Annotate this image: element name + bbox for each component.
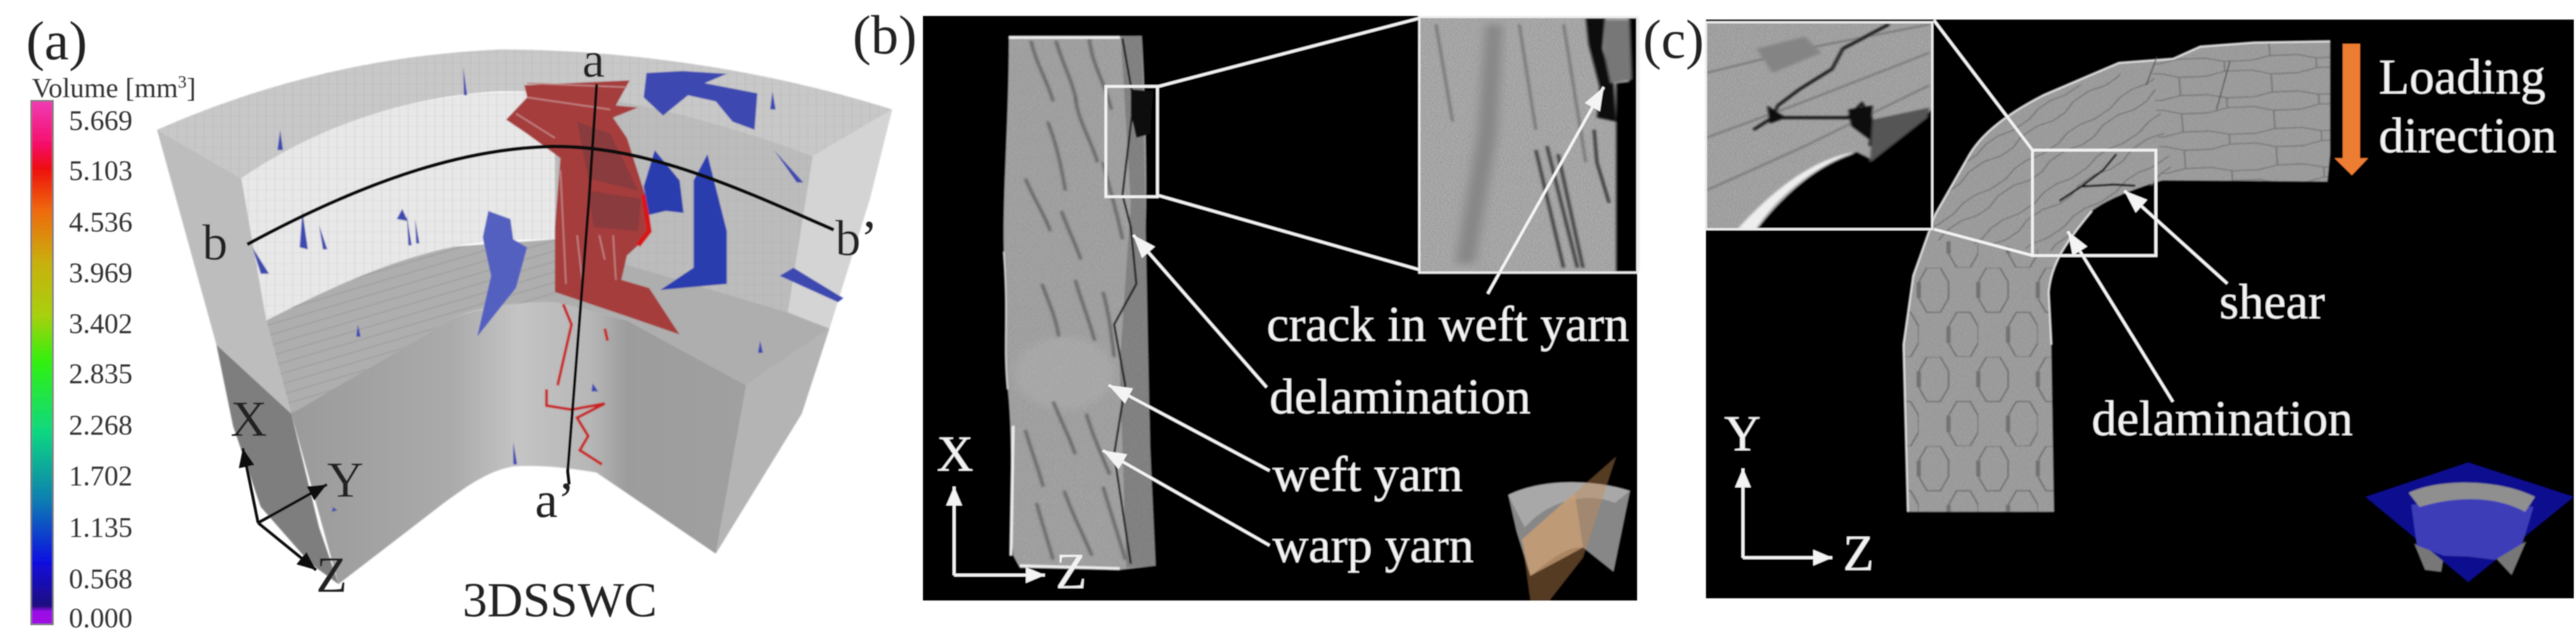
legend title: Volume [mm [32,73,178,104]
callout: delamination: delamination [2092,391,2353,446]
axis labels: Y [327,453,364,508]
callout: delamination: delamination [1270,369,1531,424]
colour bar tick values: 2.835 [69,358,133,389]
arrow: delamination [1133,235,1267,387]
3D specimen with damage volumes [157,49,893,584]
coordinate axes [937,426,1087,600]
colour bar tick values: 0.000 [69,603,133,634]
arrow: crack in weft yarn [1488,87,1604,294]
black background [1706,20,2574,598]
panel label (c): (c) [1643,9,1704,70]
callout: warp yarn: warp yarn [1272,518,1474,573]
colour bar tick values [69,105,133,634]
axis labels [231,392,364,603]
arrow: warp yarn [1103,450,1270,545]
axis labels [1724,406,1874,582]
axis labels: Z [1843,526,1874,582]
colour bar tick values: 1.702 [69,461,133,492]
callout: shear: shear [2219,274,2325,329]
coordinate axes [231,392,364,603]
colour bar tick values: 3.969 [69,257,133,289]
crack lines [2060,154,2135,201]
yarn streaks [1025,38,1125,560]
legend title: 3 [178,73,186,92]
axis labels: X [937,426,974,482]
zoom connector lines [1934,20,2032,255]
colour bar tick values: 3.402 [69,308,133,339]
colour scale legend [31,73,196,634]
colour bar tick values: 2.268 [69,410,133,441]
red damage volume [506,80,679,464]
axis labels: Z [316,548,347,603]
axis labels: Z [1056,544,1087,600]
blue damage volumes [252,67,843,512]
arrow: weft yarn [1109,385,1270,471]
axis labels: Y [1724,406,1761,462]
zoom box [2032,150,2156,255]
colour bar tick values: 0.568 [69,563,133,595]
colour bar tick values: 5.103 [69,155,133,186]
label b: b [202,215,228,271]
panel: (b) XZ CT slice [923,16,1637,600]
axis labels: X [231,392,268,447]
callout: loading direction: direction [2379,108,2556,163]
legend title: ] [186,73,196,104]
colour bar [31,101,53,624]
zoom box [1106,86,1157,197]
slice plane thumbnail [1508,456,1630,600]
colour bar tick values: 4.536 [69,207,133,238]
curved specimen slice [1904,41,2330,512]
axis labels [937,426,1087,600]
slice plane thumbnail [2366,463,2574,582]
callout: crack in weft yarn: crack in weft yarn [1267,297,1629,352]
panel label (a): (a) [26,11,87,72]
specimen slice [1003,36,1156,570]
specimen body [157,49,893,584]
panel: (c) YZ CT slice [1706,20,2574,598]
panel label (b): (b) [853,5,917,66]
callout: weft yarn: weft yarn [1272,447,1462,502]
zoom inset [1420,17,1637,273]
specimen name: 3DSSWC [463,572,657,627]
coordinate axes [1724,406,1874,582]
section line b-b' [202,146,877,271]
panel: (a) 3D damage volume [26,11,893,634]
callout: loading direction: Loading [2379,49,2546,104]
section line a-a' [535,33,605,529]
zoom connector lines [1159,18,1420,270]
label b': b’ [835,211,877,267]
arrow: loading direction [2335,44,2368,175]
label a': a’ [535,473,574,529]
colour bar tick values: 5.669 [69,105,133,136]
label a: a [582,33,605,88]
black background [923,16,1637,600]
colour bar tick values: 1.135 [69,512,133,543]
arrow: shear [2124,191,2227,284]
zoom inset [1706,22,1932,229]
arrow: delamination [2068,231,2173,402]
